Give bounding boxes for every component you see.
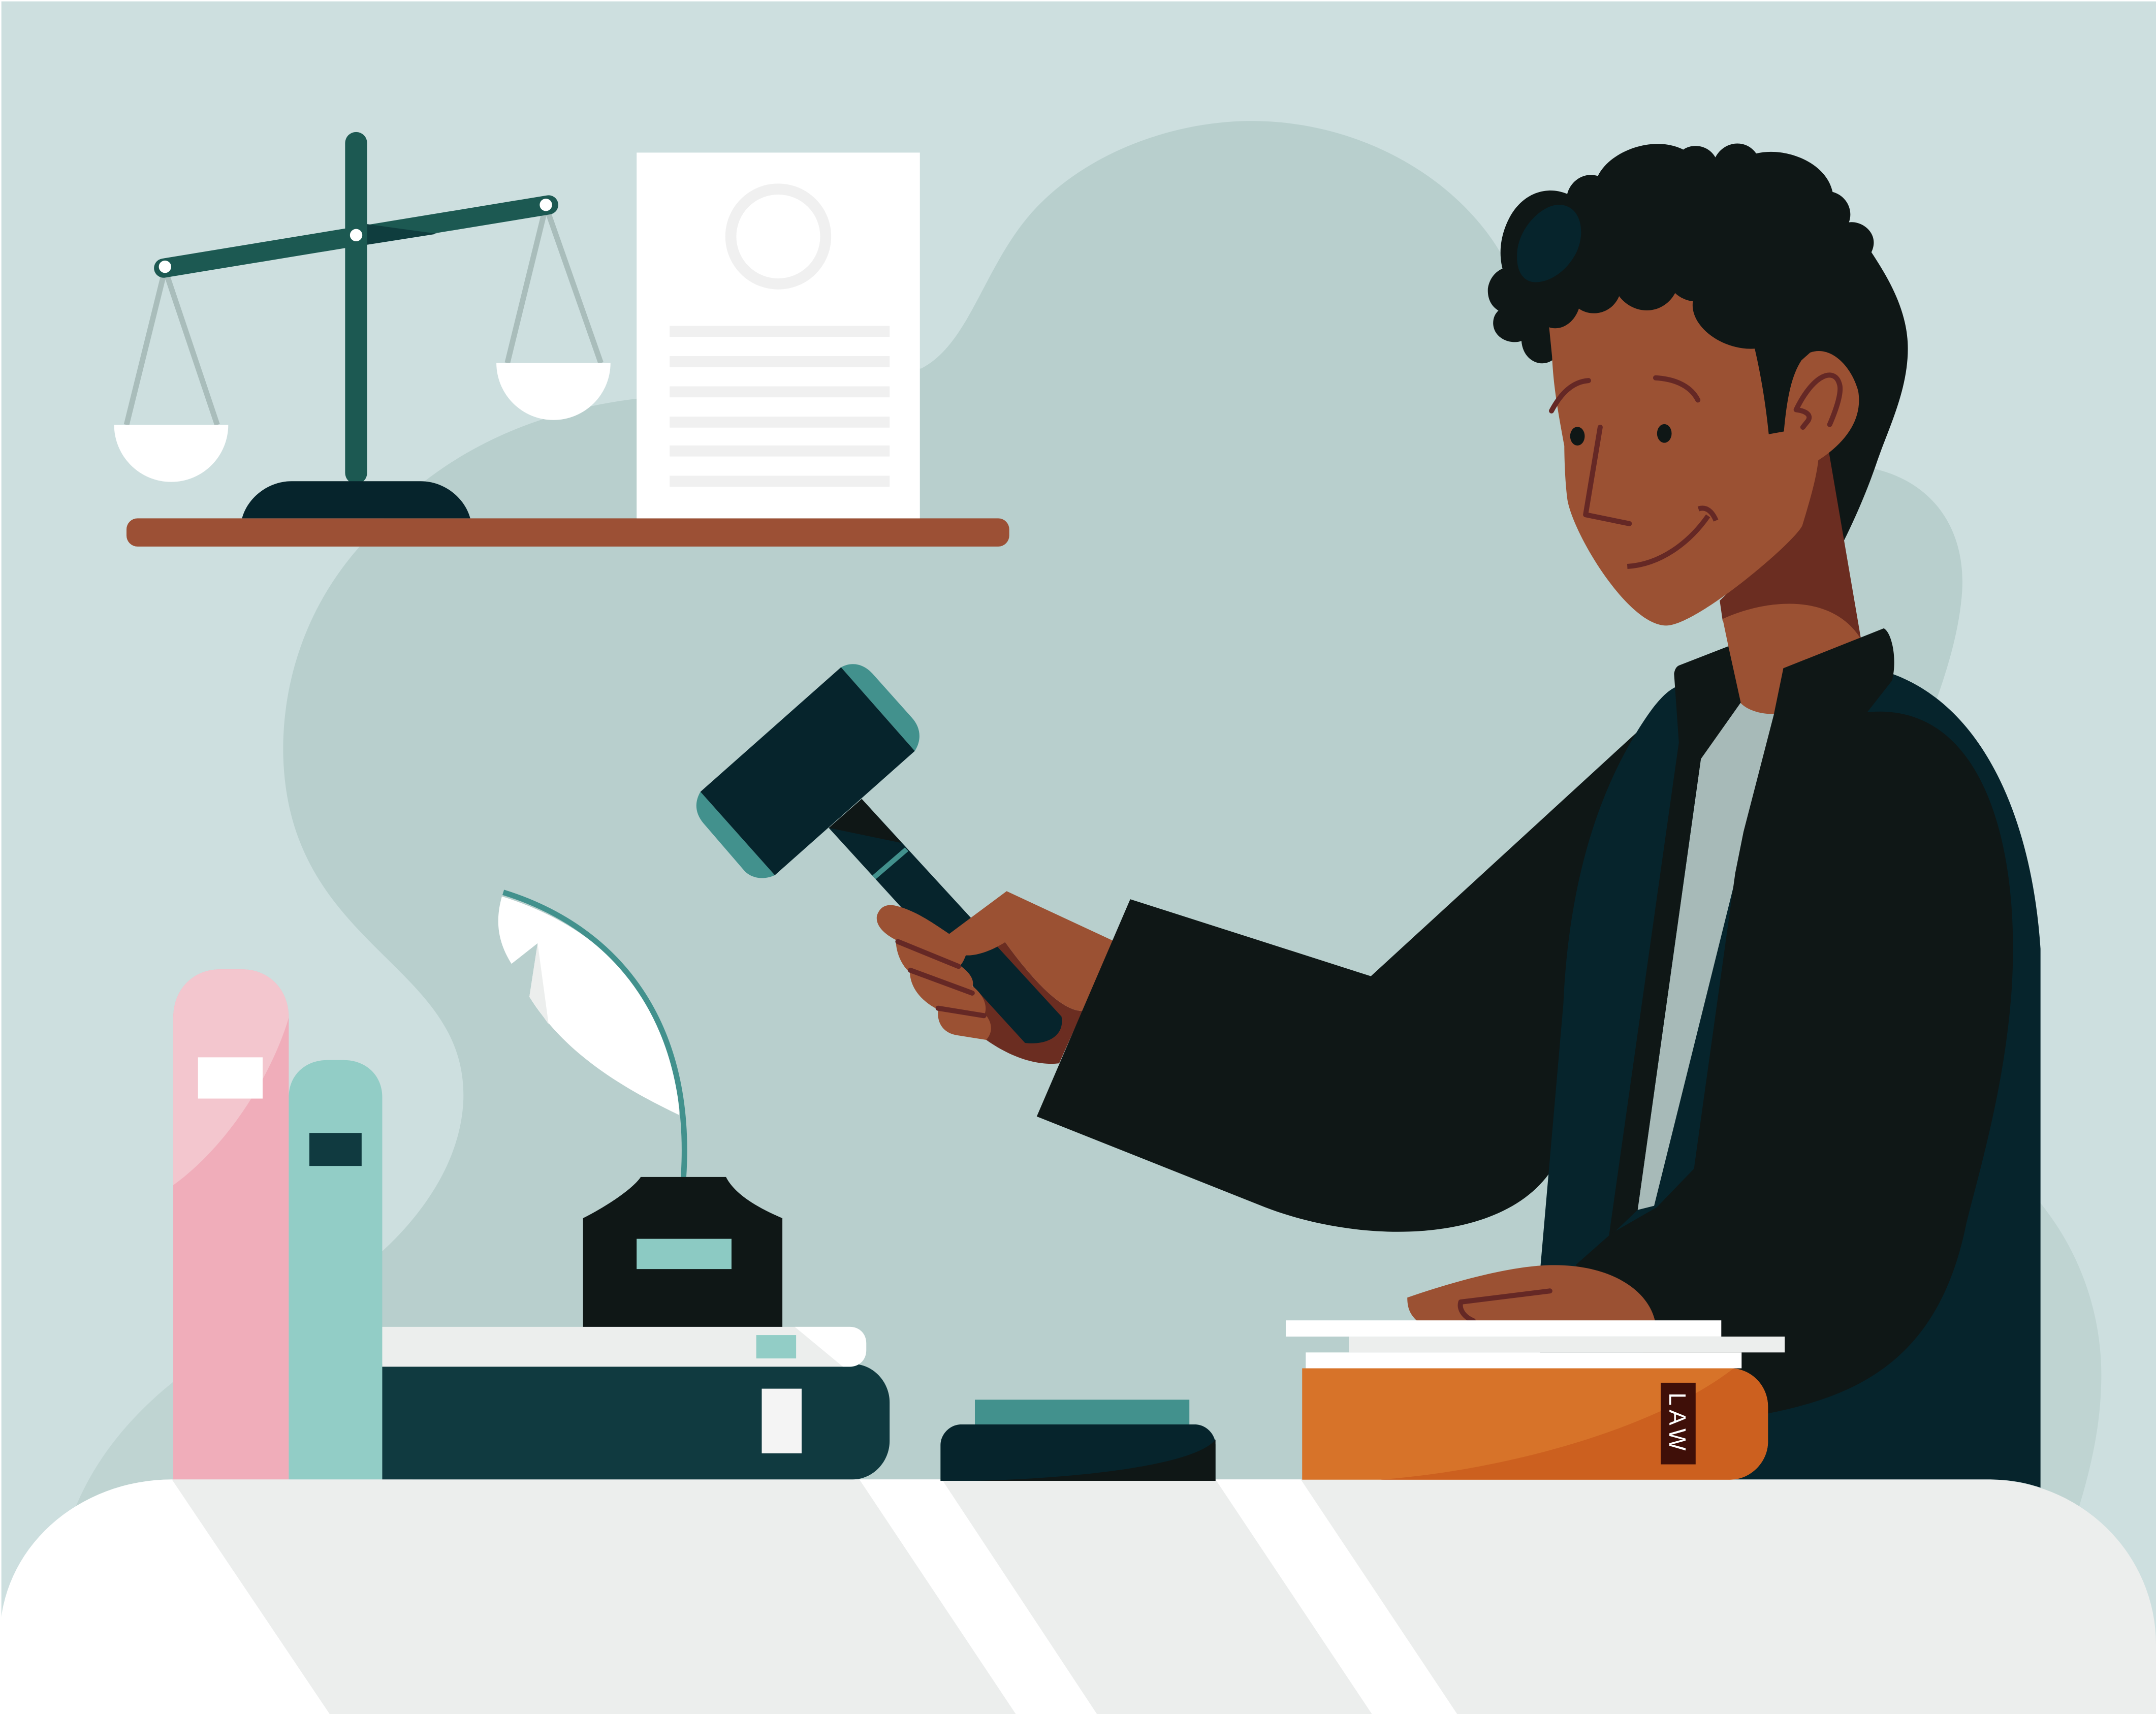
scale strings <box>126 206 601 425</box>
law label text: LAW <box>1664 1392 1691 1455</box>
knuckle line <box>1461 1291 1550 1321</box>
robe arm sleeve <box>1037 733 1650 1232</box>
scale base <box>242 481 470 518</box>
resting hand <box>1407 1265 1655 1321</box>
gavel and raised hand <box>696 664 1113 1064</box>
neck <box>1723 604 1861 749</box>
eyes <box>1570 424 1672 446</box>
scale pivots <box>159 199 552 273</box>
orange book <box>1302 1369 1768 1480</box>
pink book <box>173 969 289 1479</box>
robe body <box>1540 668 2041 1487</box>
document lines <box>670 326 890 487</box>
palm shadow <box>973 942 1083 1064</box>
gavel <box>696 664 1062 1043</box>
teal book <box>289 1060 382 1479</box>
left lapel <box>1609 646 1741 1237</box>
white horizontal book <box>382 1327 866 1367</box>
neck shadow <box>1720 450 1861 640</box>
spine label <box>1661 1383 1696 1465</box>
shirt <box>1638 703 1777 1210</box>
facial lines <box>1551 375 1840 566</box>
table <box>0 1479 2156 1714</box>
hair <box>1488 144 1908 541</box>
beam shadow <box>367 224 437 245</box>
centre book stack <box>940 1400 1216 1481</box>
left pan <box>114 425 228 482</box>
seal <box>731 189 826 284</box>
right pan <box>496 363 611 420</box>
face <box>1549 293 1859 625</box>
ink bottle <box>583 1177 782 1327</box>
shelf <box>126 518 1009 547</box>
background blobs <box>76 121 2101 1512</box>
finger lines <box>898 942 984 1015</box>
law book stack <box>1286 1320 1785 1480</box>
raised hand <box>877 891 1113 1040</box>
hair highlight <box>1517 205 1581 282</box>
balance scale <box>114 132 611 518</box>
document with seal <box>637 152 920 518</box>
right lapel and shoulder <box>1576 628 2013 1430</box>
head and neck <box>1488 144 1908 749</box>
scale beam <box>164 205 549 268</box>
quill feather <box>498 893 684 1180</box>
dark horizontal book <box>382 1364 890 1479</box>
scale pole <box>345 132 367 484</box>
